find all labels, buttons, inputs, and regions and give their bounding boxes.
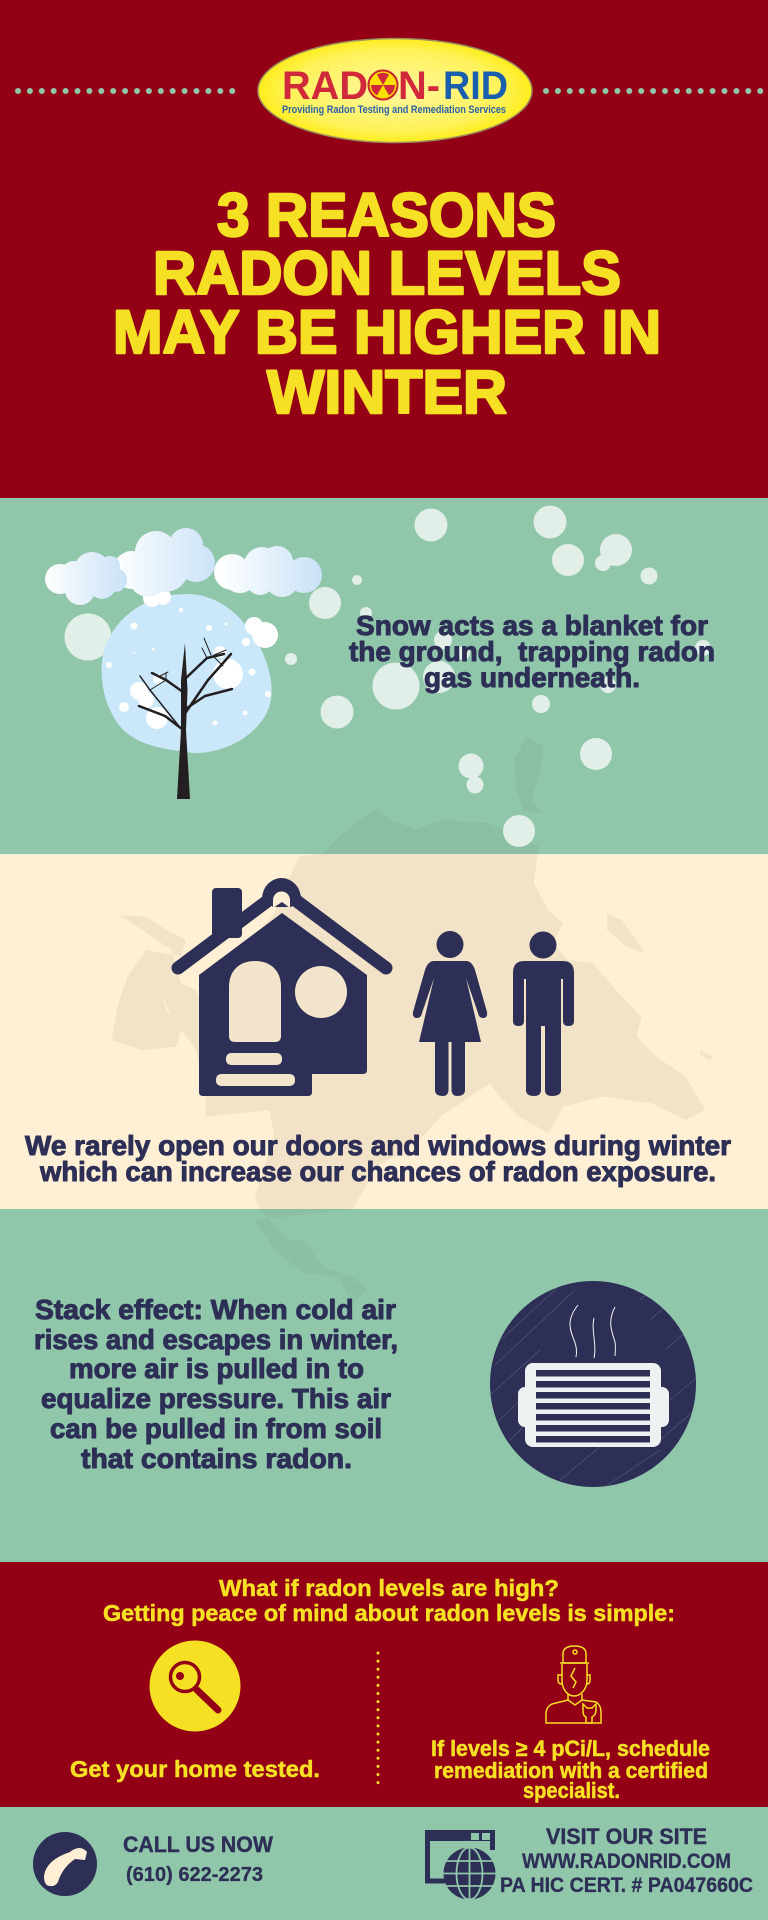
text: schedule remediation: remediation with a certified xyxy=(434,1758,708,1783)
text: visit our site xyxy=(500,1824,753,1897)
icon: technician xyxy=(546,1646,601,1723)
logo: Providing Radon Testing and Remediation Services xyxy=(282,104,506,116)
text: visit our site: VISIT OUR SITE xyxy=(546,1824,707,1849)
icon: magnifying glass xyxy=(150,1640,240,1732)
text: schedule remediation: If levels ≥ 4 pCi/L, schedule xyxy=(431,1736,710,1761)
icon: radiator xyxy=(490,1270,700,1490)
logo: RID xyxy=(443,64,508,108)
dotted line right xyxy=(546,88,761,94)
logo xyxy=(258,38,532,142)
text: visit our site: PA HIC CERT. # PA047660C xyxy=(500,1874,753,1897)
text: snow: Snow acts as a blanket for xyxy=(356,610,708,641)
text: stack effect xyxy=(34,1294,398,1474)
panel: contact footer xyxy=(0,1807,768,1920)
icon: web browser and globe xyxy=(425,1830,496,1900)
icon: woman xyxy=(413,931,487,1096)
text: call us: CALL US NOW xyxy=(123,1832,273,1857)
text: snow xyxy=(349,610,715,693)
title: RADON LEVELS xyxy=(153,239,621,307)
title xyxy=(113,181,661,426)
text: call us xyxy=(123,1832,273,1886)
title: 3 REASONS xyxy=(217,181,556,249)
text: doors and windows: which can increase our chances of radon exposure. xyxy=(39,1156,716,1187)
divider xyxy=(376,1653,380,1783)
tree illustration xyxy=(102,589,278,799)
text: doors and windows: We rarely open our doors and windows during winter xyxy=(25,1130,731,1161)
heading: What if radon levels are high? xyxy=(219,1575,559,1601)
text: visit our site: WWW.RADONRID.COM xyxy=(522,1850,731,1873)
text: schedule remediation xyxy=(431,1736,710,1803)
icon: man xyxy=(513,932,574,1096)
text: stack effect: rises and escapes in winter, xyxy=(34,1324,398,1355)
panel: snow blanket xyxy=(0,498,768,854)
text: stack effect: that contains radon. xyxy=(81,1443,352,1474)
text: doors and windows xyxy=(25,1130,731,1187)
text: get tested: Get your home tested. xyxy=(70,1756,320,1782)
text: snow: the ground, trapping radon xyxy=(349,636,715,667)
panel: stack effect xyxy=(0,1209,768,1562)
text: stack effect: equalize pressure. This air xyxy=(41,1383,391,1414)
panel: header xyxy=(0,0,768,498)
logo: N- xyxy=(398,64,440,108)
title: WINTER xyxy=(267,358,507,426)
heading: Getting peace of mind about radon levels is simple: xyxy=(103,1600,675,1626)
heading xyxy=(103,1575,675,1626)
clouds xyxy=(45,528,322,605)
icon: house xyxy=(178,878,386,1096)
text: schedule remediation: specialist. xyxy=(523,1778,620,1803)
text: stack effect: can be pulled in from soil xyxy=(50,1413,382,1444)
dotted line left xyxy=(18,88,233,94)
icon: phone xyxy=(33,1832,97,1896)
text: snow: gas underneath. xyxy=(424,662,640,693)
text: stack effect: Stack effect: When cold air xyxy=(35,1294,396,1325)
panel: what if levels are high xyxy=(0,1562,768,1807)
logo: RAD xyxy=(282,64,368,108)
panel: closed doors and windows xyxy=(0,854,768,1209)
snowflakes xyxy=(64,506,711,847)
text: stack effect: more air is pulled in to xyxy=(69,1353,364,1384)
title: MAY BE HIGHER IN xyxy=(113,298,661,366)
text: call us: (610) 622-2273 xyxy=(126,1864,263,1886)
